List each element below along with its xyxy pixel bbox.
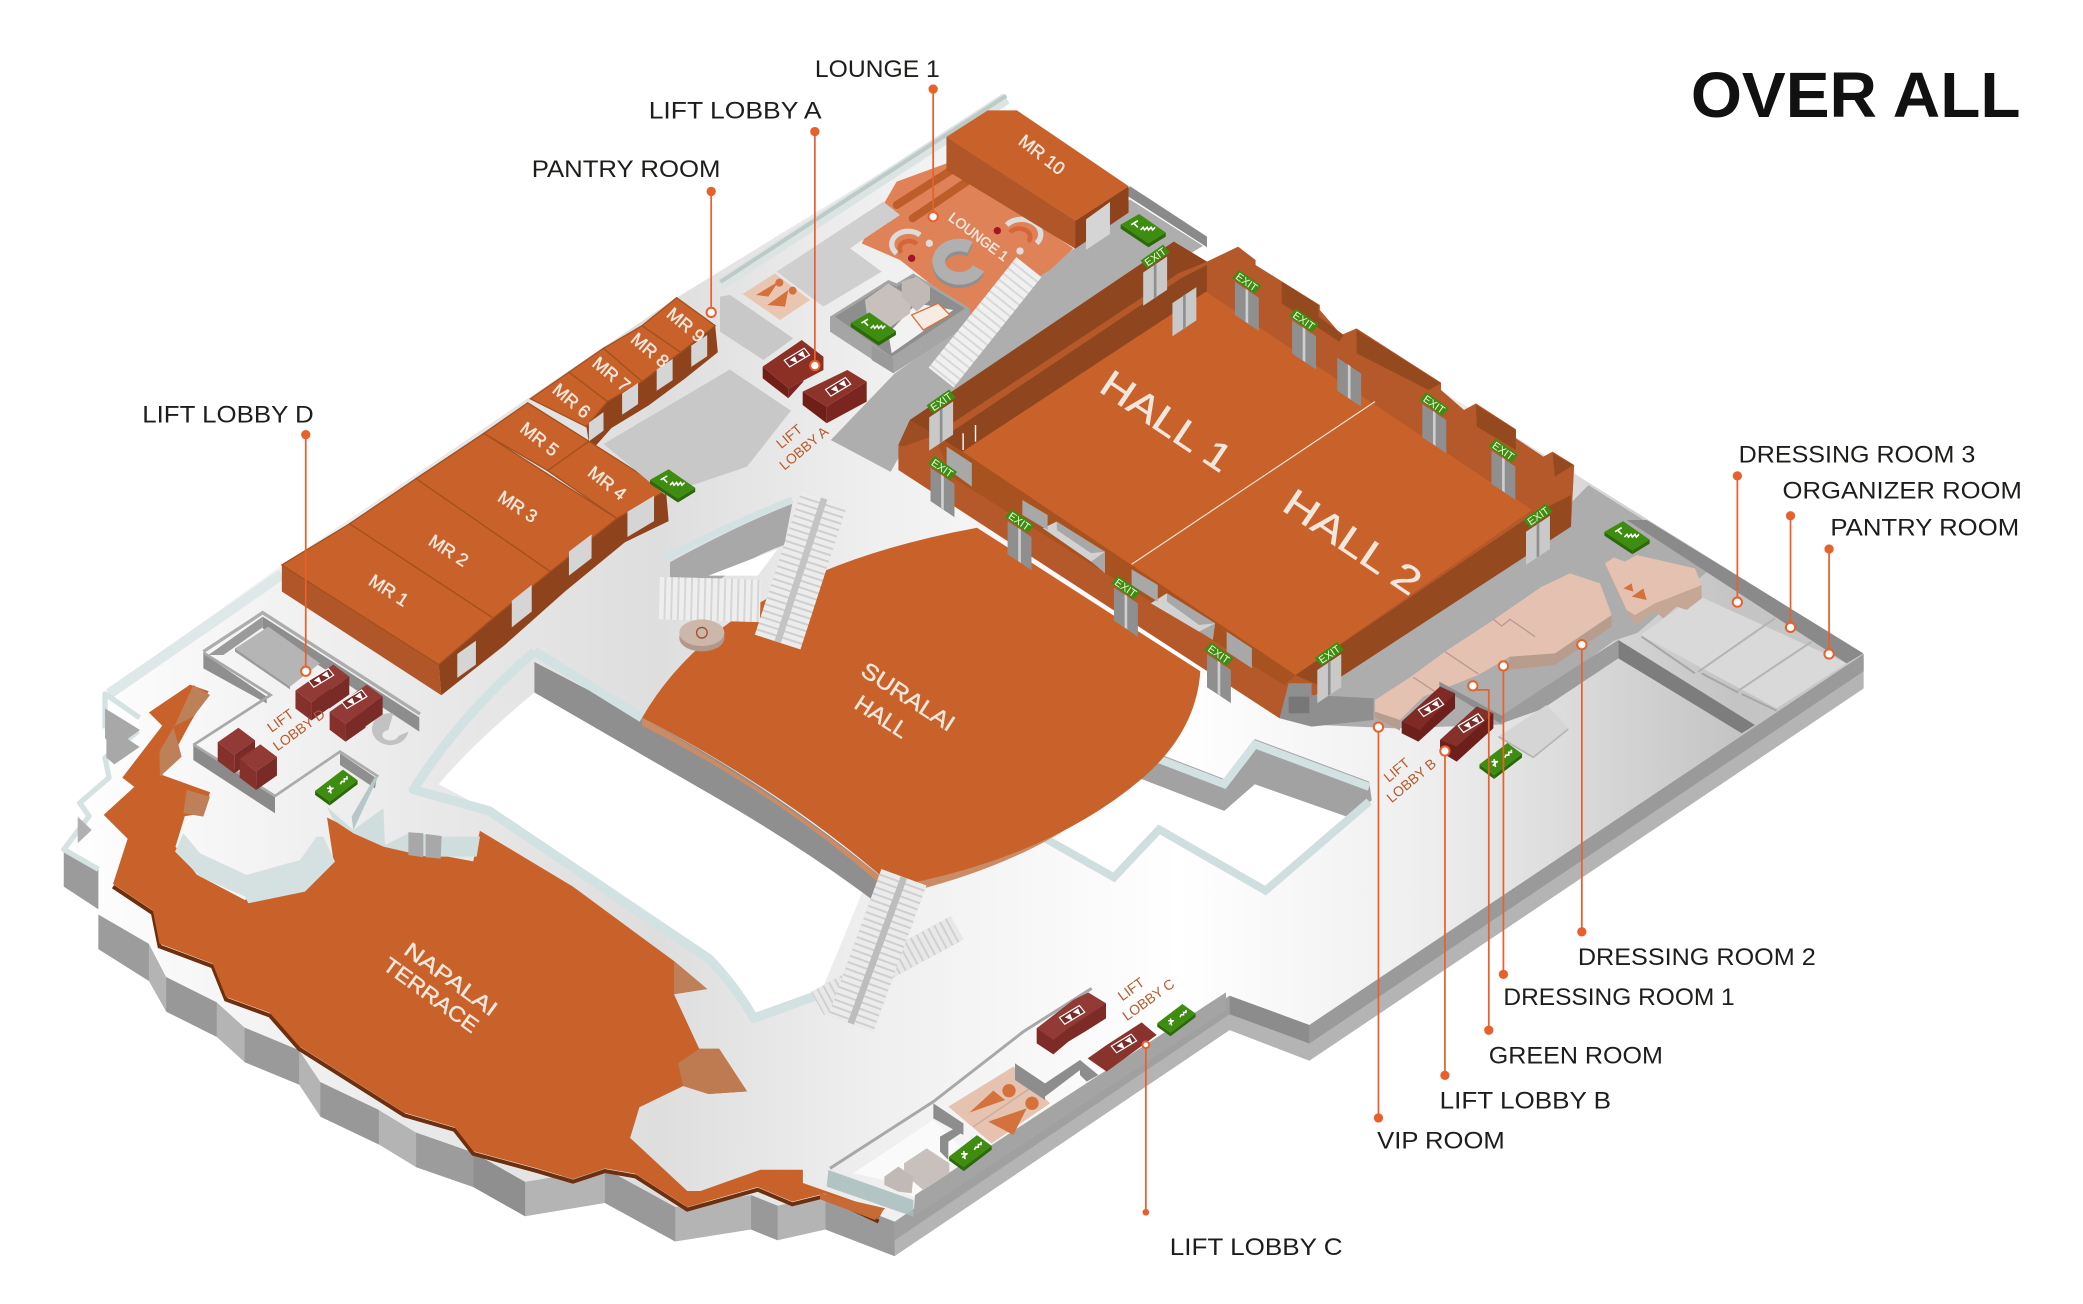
right void with wall xyxy=(1043,739,1372,891)
panel: east service rooms xyxy=(1375,520,1863,758)
panel: hall 1 and hall 2 xyxy=(898,242,1574,727)
label: MR 2: MR 2 xyxy=(425,531,472,571)
heading: hall 1: HALL 1 xyxy=(1092,362,1240,481)
panel: east restroom xyxy=(1605,555,1702,625)
panel: MR 10 xyxy=(946,110,1129,250)
label: small lift lobby names on plan: LIFT xyxy=(264,705,297,735)
label: small lift lobby names on plan xyxy=(264,421,1439,1024)
heading: suralai hall: SURALAI xyxy=(857,657,959,736)
exit doors and signs xyxy=(927,245,1553,703)
label: MR 3: MR 3 xyxy=(494,487,541,527)
callout: pantry room: PANTRY ROOM xyxy=(532,156,720,183)
label: MR 5: MR 5 xyxy=(516,418,562,460)
label: MR 9: MR 9 xyxy=(663,304,709,347)
panel: north utility rooms xyxy=(720,202,900,360)
exit doors and signs: EXIT xyxy=(1006,510,1033,534)
callout: lift lobby A: LIFT LOBBY A xyxy=(649,97,822,124)
panel: lift lobby B xyxy=(1402,682,1503,762)
exit doors and signs: EXIT xyxy=(1317,643,1343,666)
heading: hall: HALL xyxy=(850,690,913,743)
heading: terrace: TERRACE xyxy=(379,953,483,1038)
panel: lift lobby C and restroom xyxy=(820,988,1226,1220)
central void with wall xyxy=(413,651,893,1018)
heading: napalai: NAPALAI xyxy=(400,938,502,1021)
exit doors and signs: EXIT xyxy=(1525,505,1552,528)
label: small lift lobby names on plan: LIFT xyxy=(773,421,806,451)
panel: service room xyxy=(830,273,970,373)
slab side faces xyxy=(64,654,1864,1256)
icon: lift cubes D xyxy=(218,665,383,790)
label: small lift lobby names on plan: LIFT xyxy=(1115,974,1148,1004)
icon: no-entry round desk xyxy=(679,619,724,651)
panel: dressing rooms and vip room xyxy=(1375,573,1612,731)
label: small lift lobby names on plan: LOBBY C xyxy=(1119,975,1177,1024)
panel: meeting rooms 1-9 xyxy=(282,298,718,695)
callout: lounge 1: LOUNGE 1 xyxy=(815,56,940,83)
exit doors and signs: EXIT xyxy=(1421,393,1447,417)
exit doors and signs: EXIT xyxy=(1112,577,1139,600)
leader lines and dots xyxy=(301,84,1834,1216)
panel: suralai hall xyxy=(642,528,1200,896)
panel: staircases xyxy=(659,267,1029,1024)
back service corridor xyxy=(831,186,1715,728)
icon: right seating xyxy=(1007,219,1041,243)
label: MR 4: MR 4 xyxy=(584,462,630,504)
label: small lift lobby names on plan: LIFT xyxy=(1380,754,1413,785)
panel: napalai terrace xyxy=(104,685,883,1222)
callout: pantry room right: PANTRY ROOM xyxy=(1830,515,2019,542)
callout: VIP room: VIP ROOM xyxy=(1377,1127,1505,1154)
label: lounge 1: LOUNGE 1 xyxy=(946,209,1012,264)
icon: central reception desk xyxy=(939,245,978,282)
exit doors and signs: EXIT xyxy=(1233,271,1260,295)
heading: hall 2: HALL 2 xyxy=(1275,481,1429,604)
exit doors and signs: EXIT xyxy=(1290,309,1317,333)
label: MR 7: MR 7 xyxy=(589,353,634,396)
panel: lift lobby A xyxy=(763,340,867,423)
callout: dressing room 2: DRESSING ROOM 2 xyxy=(1578,944,1816,971)
panel: MR 10: MR 10 xyxy=(1015,131,1069,179)
callout: lift lobby B: LIFT LOBBY B xyxy=(1440,1088,1611,1115)
floor slab xyxy=(64,96,1864,1222)
label: MR 1: MR 1 xyxy=(365,570,412,611)
callout: dressing room 3: DRESSING ROOM 3 xyxy=(1739,442,1975,469)
exit doors and signs: EXIT xyxy=(1143,245,1169,269)
exit doors and signs: EXIT xyxy=(929,457,955,481)
label: small lift lobby names on plan: LOBBY A xyxy=(776,423,832,473)
callout: green room: GREEN ROOM xyxy=(1489,1042,1663,1069)
callout: dressing room 1: DRESSING ROOM 1 xyxy=(1503,984,1735,1011)
label: MR 6: MR 6 xyxy=(549,379,594,422)
icon: left seating xyxy=(892,231,920,253)
exit doors and signs: EXIT xyxy=(929,390,955,414)
icon: lift symbols xyxy=(784,348,1483,1053)
callout: lift lobby C: LIFT LOBBY C xyxy=(1170,1234,1343,1261)
label: MR 8: MR 8 xyxy=(627,329,673,372)
panel: lounge and upper rooms xyxy=(720,163,1073,373)
label: small lift lobby names on plan: LOBBY B xyxy=(1383,755,1439,806)
label: small lift lobby names on plan: LOBBY D xyxy=(270,706,328,754)
panel: ramp area xyxy=(604,370,791,494)
icon: exit stairs signs xyxy=(315,214,1650,1171)
glass railing along outer edge xyxy=(64,96,1006,869)
callout: lift lobby D: LIFT LOBBY D xyxy=(142,402,314,429)
panel: lobby D walls xyxy=(193,613,420,830)
exit doors and signs: EXIT xyxy=(1490,440,1516,463)
panel: courtyard glass and lift lobby D xyxy=(78,613,480,903)
title: OVER ALL xyxy=(1691,59,2020,131)
panel: ramp wall near stairs xyxy=(665,500,792,592)
exit doors and signs: EXIT xyxy=(1205,643,1232,667)
callout: organizer room: ORGANIZER ROOM xyxy=(1783,477,2022,504)
